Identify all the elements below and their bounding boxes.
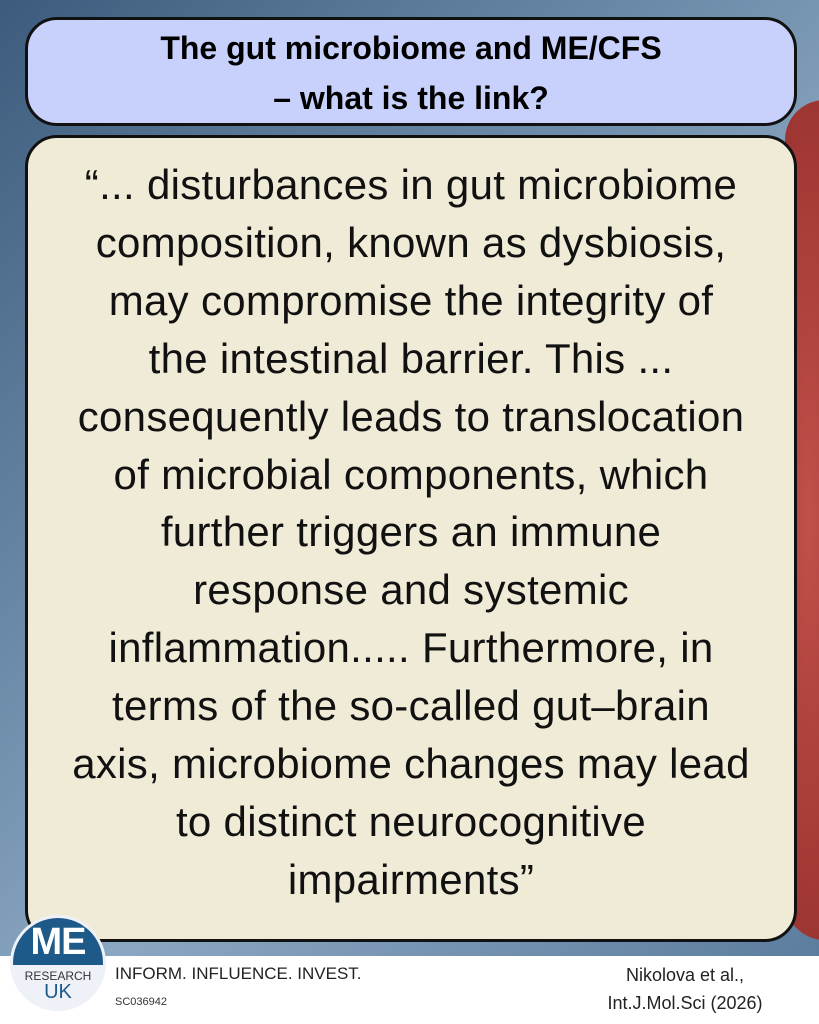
quote box: of microbial components, which: [114, 451, 708, 498]
decorative organ imagery: [785, 100, 819, 940]
logo: ME Research UK: UK: [44, 981, 72, 1003]
quote box: response and systemic: [193, 566, 629, 613]
quote box: axis, microbiome changes may lead: [72, 740, 750, 787]
title box: – what is the link?: [273, 80, 549, 116]
citation: [607, 965, 763, 1013]
quote box: inflammation..... Furthermore, in: [108, 624, 714, 671]
citation: Int.J.Mol.Sci (2026): [607, 993, 763, 1013]
quote box: “... disturbances in gut microbiome: [85, 161, 737, 208]
quote box: impairments”: [288, 856, 534, 903]
quote box: further triggers an immune: [161, 508, 661, 555]
quote box: the intestinal barrier. This ...: [149, 335, 673, 382]
charity number: SC036942: [115, 996, 167, 1008]
quote box: composition, known as dysbiosis,: [96, 219, 726, 266]
footer band: [0, 956, 819, 1024]
quote box: terms of the so-called gut–brain: [112, 682, 710, 729]
tagline: INFORM. INFLUENCE. INVEST.: [115, 964, 362, 983]
quote box: consequently leads to translocation: [78, 393, 744, 440]
title box: [25, 17, 797, 126]
logo: ME Research UK: [10, 915, 106, 1011]
quote box: to distinct neurocognitive: [176, 798, 646, 845]
logo: ME Research UK: ME: [30, 921, 86, 963]
title box: The gut microbiome and ME/CFS: [160, 30, 662, 66]
logo: ME Research UK: RESEARCH: [25, 969, 91, 983]
quote box: [25, 135, 797, 942]
quote box: may compromise the integrity of: [109, 277, 713, 324]
citation: Nikolova et al.,: [626, 965, 744, 985]
